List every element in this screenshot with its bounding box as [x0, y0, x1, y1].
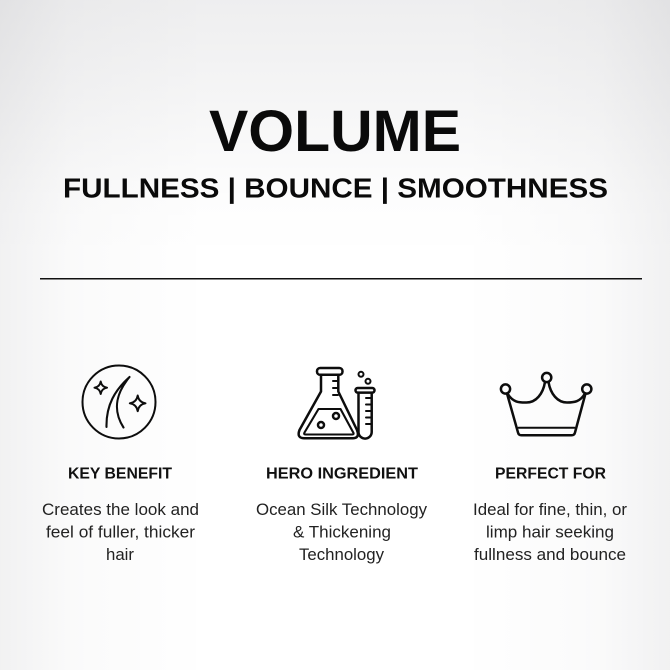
- text: perfect for: [473, 501, 628, 564]
- text: hero ingredient: Ocean Silk Technology: [256, 501, 428, 519]
- text: key benefit: Creates the look and: [42, 501, 199, 519]
- panel: perfect for: [473, 373, 628, 564]
- title: VOLUME: [209, 99, 461, 164]
- panel: key benefit: [42, 366, 199, 564]
- text: key benefit: hair: [106, 546, 135, 564]
- text: perfect for: Ideal for fine, thin, or: [473, 501, 628, 519]
- icon: flask and test tube: [299, 368, 374, 439]
- text: perfect for: limp hair seeking: [486, 524, 614, 542]
- heading: key benefit: KEY BENEFIT: [68, 466, 172, 482]
- text: hero ingredient: Technology: [299, 546, 385, 564]
- text: perfect for: fullness and bounce: [474, 546, 626, 564]
- subtitle: FULLNESS | BOUNCE | SMOOTHNESS: [63, 172, 608, 204]
- panel: hero ingredient: [256, 368, 428, 564]
- text: key benefit: feel of fuller, thicker: [46, 524, 196, 542]
- heading: hero ingredient: HERO INGREDIENT: [266, 466, 418, 482]
- icon: hair strand with sparkles: [82, 366, 156, 438]
- text: hero ingredient: & Thickening: [293, 524, 391, 542]
- text: key benefit: [42, 501, 199, 564]
- text: hero ingredient: [256, 501, 428, 564]
- heading: perfect for: PERFECT FOR: [495, 466, 606, 482]
- icon: crown: [501, 373, 591, 435]
